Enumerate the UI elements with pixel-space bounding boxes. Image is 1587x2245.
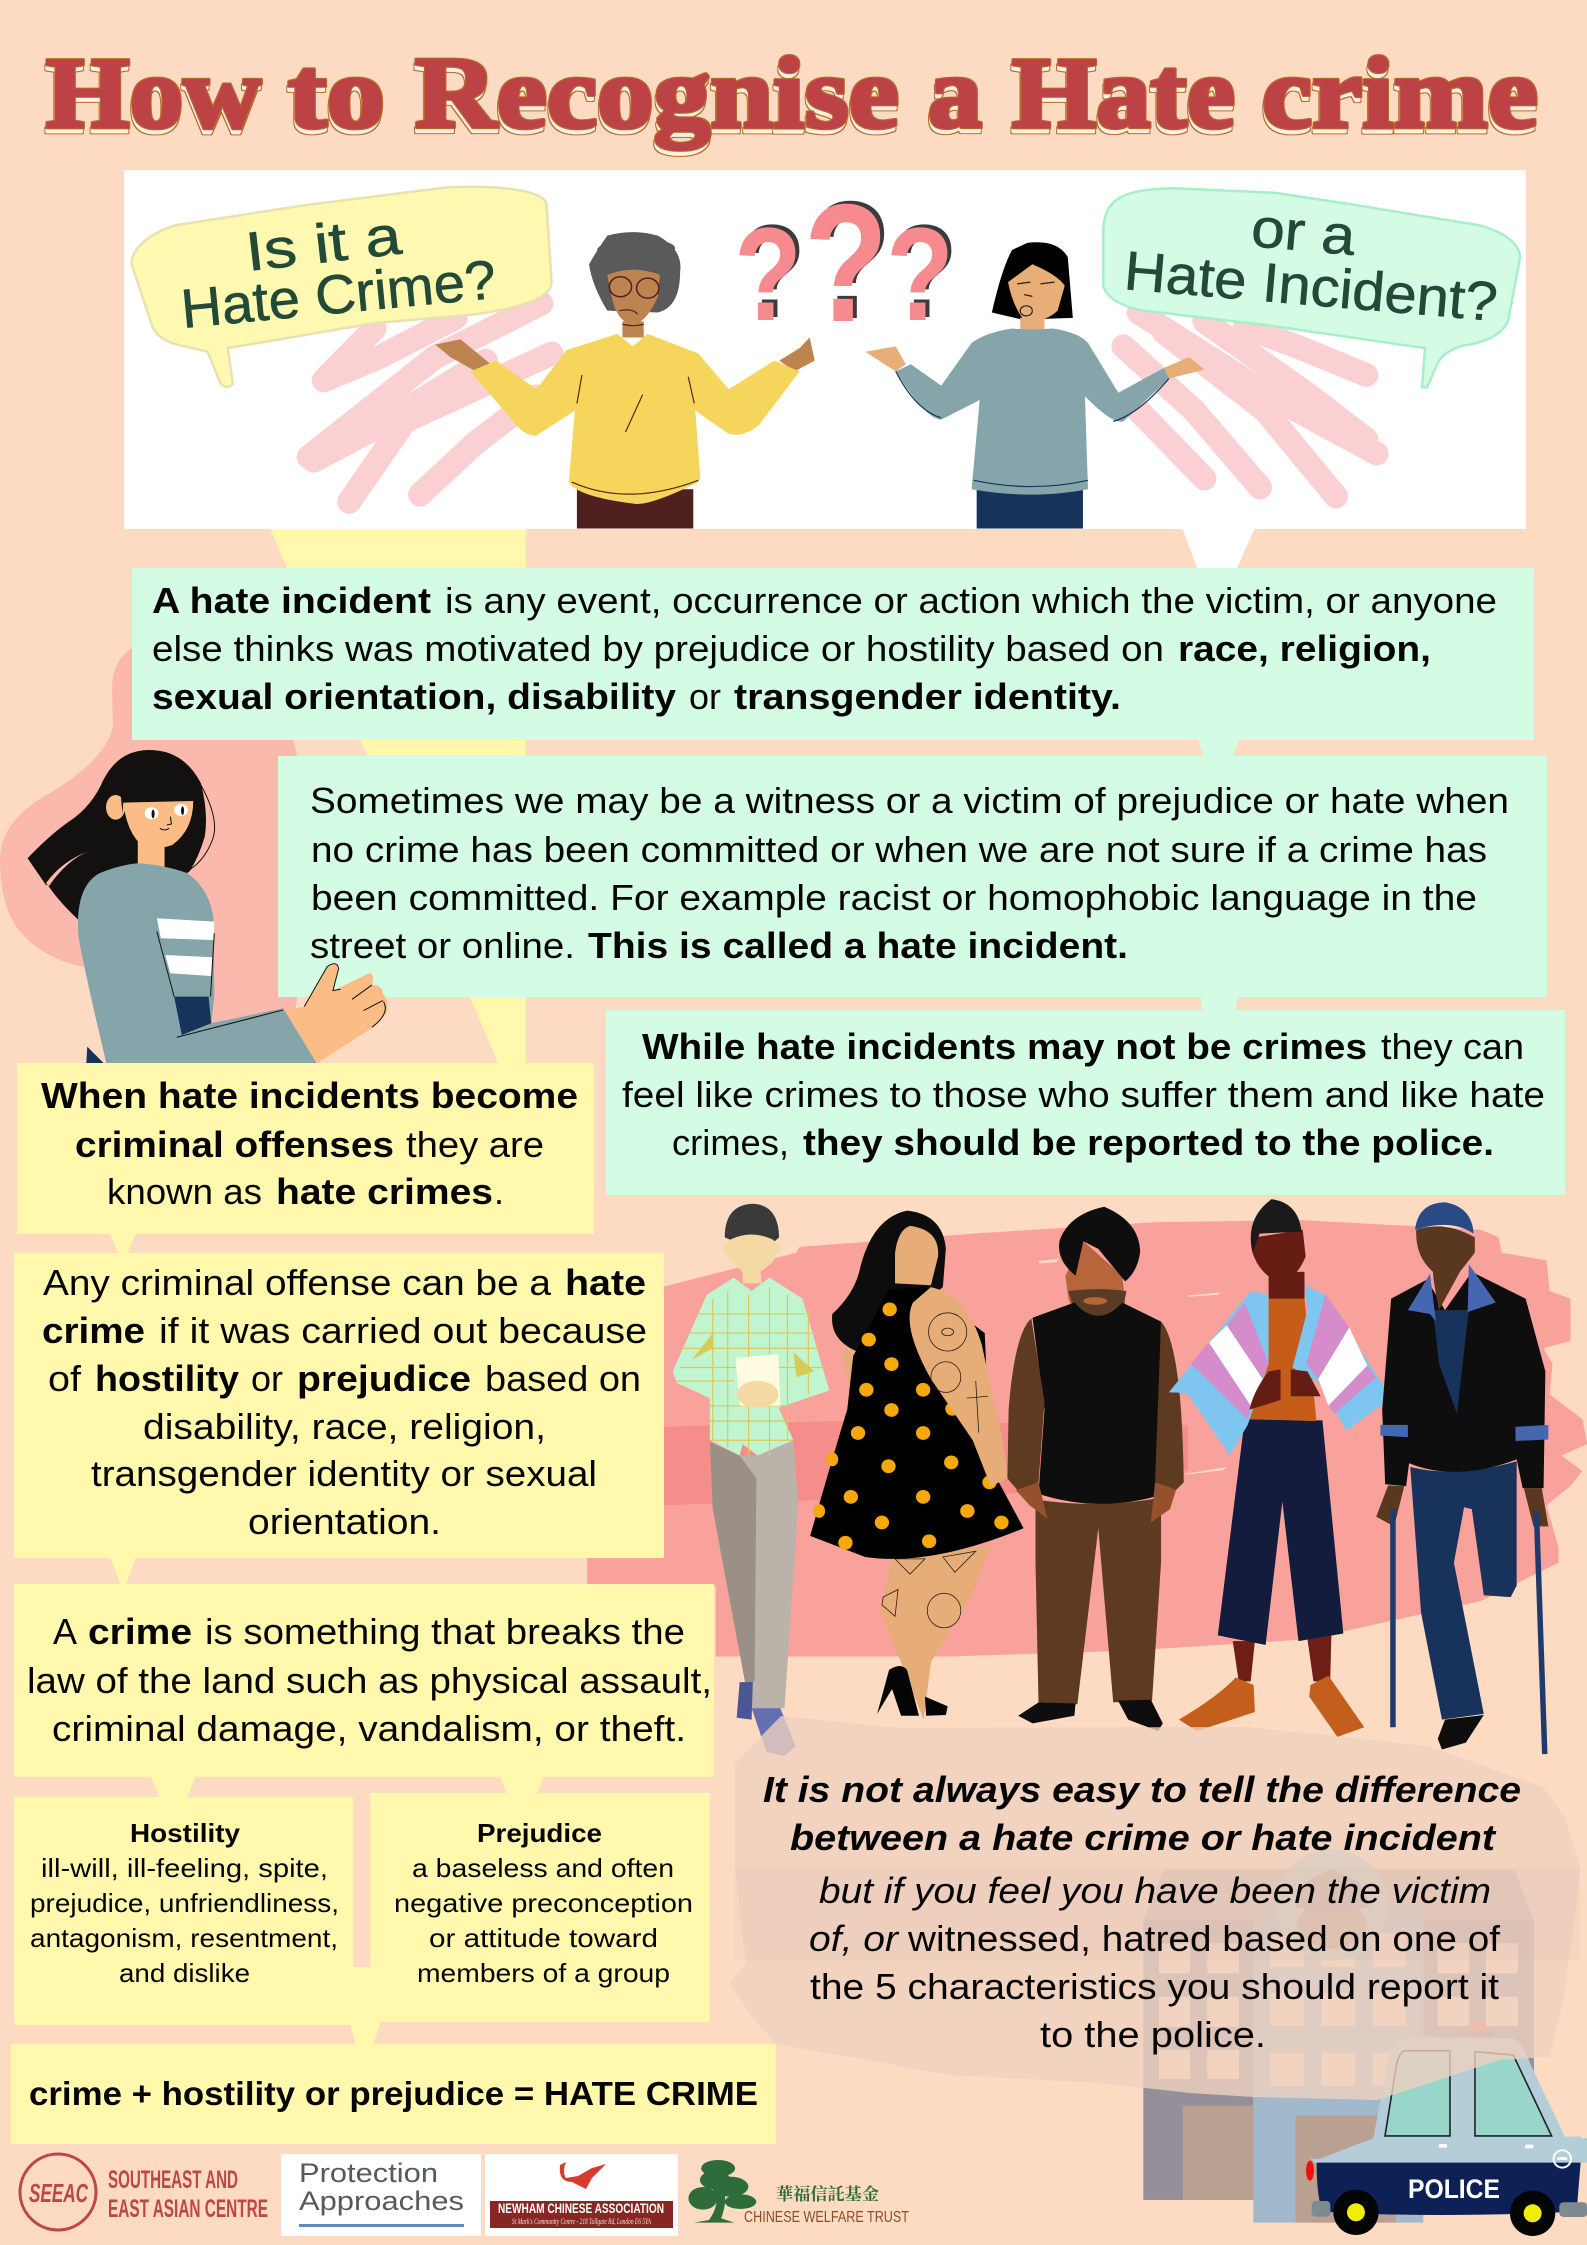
- panel: any criminal offense can be a hate crime: based on: [485, 1358, 641, 1399]
- speech bubble: is it a hate crime: [132, 187, 552, 387]
- panel: any criminal offense can be a hate crime: hostility: [95, 1358, 239, 1399]
- title: crime: [1262, 37, 1538, 150]
- panel: when hate incidents become criminal offenses: [17, 1063, 594, 1254]
- panel: when hate incidents become criminal offenses: .: [494, 1171, 504, 1212]
- panel: a crime is something: criminal damage, vandalism, or theft.: [52, 1708, 686, 1749]
- panel: while hate incidents may not be crimes: they can: [1381, 1026, 1524, 1067]
- panel: hate incident definition: else thinks was motivated by prejudice or hostility based on: [152, 628, 1164, 669]
- closing text: it is not always easy: but if you feel you have been the victim: [819, 1870, 1491, 1911]
- closing text: it is not always easy: witnessed, hatred based on one of: [907, 1918, 1501, 1959]
- text: prejudice definition: or attitude toward: [429, 1923, 658, 1953]
- panel: while hate incidents may not be crimes: While hate incidents may not be crimes: [642, 1026, 1367, 1067]
- title: Recognise: [415, 37, 899, 150]
- panel: a crime is something: crime: [88, 1611, 192, 1652]
- white illustration panel: [124, 170, 1526, 570]
- panel: a crime is something: is something that breaks the: [205, 1611, 685, 1652]
- closing text: it is not always easy: of, or: [809, 1918, 900, 1959]
- logo: Newham Chinese Association: [485, 2154, 678, 2236]
- title: Hate: [1012, 37, 1235, 150]
- panel: sometimes we may be a witness: street or online.: [310, 925, 575, 966]
- logo: Newham Chinese Association: NEWHAM CHINESE ASSOCIATION: [498, 2200, 664, 2216]
- panel: any criminal offense can be a hate crime: disability, race, religion,: [143, 1406, 546, 1447]
- logo: Protection Approaches: [281, 2154, 481, 2236]
- panel: hate incident definition: [132, 568, 1534, 757]
- panel: hate crime formula: crime + hostility or prejudice = HATE CRIME: [29, 2075, 758, 2112]
- logo: SEEAC: SOUTHEAST AND: [108, 2166, 238, 2194]
- panel: any criminal offense can be a hate crime: if it was carried out because: [159, 1310, 647, 1351]
- panel: when hate incidents become criminal offenses: known as: [107, 1171, 262, 1212]
- panel: while hate incidents may not be crimes: feel like crimes to those who suffer them and like hate: [622, 1074, 1545, 1115]
- title: a: [928, 37, 982, 150]
- logo: Chinese Welfare Trust: 華福信託基金: [776, 2184, 879, 2204]
- panel: hostility and prejudice definitions: [14, 1793, 710, 2045]
- panel: hate incident definition: is any event, occurrence or action which the victim, or anyone: [445, 580, 1497, 621]
- illustration: question marks: ?: [734, 200, 802, 348]
- panel: sometimes we may be a witness: [278, 756, 1547, 1012]
- panel: when hate incidents become criminal offenses: When hate incidents become: [41, 1075, 578, 1116]
- panel: a crime is something: A: [53, 1611, 77, 1652]
- beige brush stroke behind the closing text: [730, 1716, 1580, 2100]
- illustration: group of five people: [673, 1199, 1548, 1756]
- man with crutches: [1376, 1202, 1548, 1754]
- logo: Chinese Welfare Trust: [688, 2160, 909, 2226]
- illustration: question marks: ?: [886, 200, 954, 348]
- panel: hate incident definition: sexual orientation, disability: [152, 676, 676, 717]
- heading: hostility: Hostility: [130, 1818, 241, 1848]
- panel: hate incident definition: or: [689, 676, 721, 717]
- speech bubble: or a hate incident: Hate Incident?: [1122, 239, 1500, 333]
- text: prejudice definition: a baseless and often: [412, 1853, 674, 1883]
- person with notepad: [673, 1204, 829, 1756]
- illustration: pink scribbles: [309, 304, 1376, 502]
- closing text: it is not always easy: between a hate crime or hate incident: [790, 1817, 1497, 1858]
- panel: hate crime formula: [11, 2044, 776, 2144]
- speech bubble: or a hate incident: or a: [1249, 196, 1358, 267]
- panel: any criminal offense can be a hate crime: transgender identity or sexual: [91, 1453, 597, 1494]
- text: hostility definition: antagonism, resentment,: [30, 1923, 338, 1953]
- panel: a crime is something: law of the land such as physical assault,: [27, 1660, 712, 1701]
- panel: any criminal offense can be a hate crime: prejudice: [297, 1358, 471, 1399]
- illustration: question marks: [734, 169, 954, 357]
- police station building: [1143, 1849, 1534, 2223]
- panel: while hate incidents may not be crimes: crimes,: [672, 1122, 789, 1163]
- panel: when hate incidents become criminal offenses: hate crimes: [276, 1171, 493, 1212]
- panel: while hate incidents may not be crimes: [606, 1010, 1565, 1195]
- logo: SEEAC: EAST ASIAN CENTRE: [108, 2195, 268, 2223]
- closing text: it is not always easy: It is not always easy to tell the difference: [763, 1769, 1521, 1810]
- title: [46, 37, 1538, 150]
- heading: prejudice: Prejudice: [477, 1818, 602, 1848]
- panel: sometimes we may be a witness: Sometimes we may be a witness or a victim of prejudice or hate when: [310, 780, 1509, 821]
- person with trans flag: [1169, 1199, 1391, 1737]
- title: How: [46, 37, 261, 150]
- illustration: question marks: ?: [804, 169, 888, 357]
- illustration: person in yellow sweater: [435, 232, 815, 529]
- closing text: it is not always easy: [763, 1769, 1521, 2055]
- text: hostility definition: prejudice, unfriendliness,: [30, 1888, 339, 1918]
- salmon blob behind the woman: [0, 648, 297, 1040]
- illustration: person in blue sweater: [865, 242, 1204, 529]
- text: prejudice definition: [394, 1853, 693, 1988]
- pink brush stroke behind the group of people: [587, 1220, 1587, 1656]
- panel: while hate incidents may not be crimes: they should be reported to the police.: [803, 1122, 1494, 1163]
- panel: any criminal offense can be a hate crime: [14, 1253, 664, 1585]
- text: prejudice definition: members of a group: [417, 1958, 670, 1988]
- text: prejudice definition: negative preconception: [394, 1888, 693, 1918]
- text: hostility definition: ill-will, ill-feeling, spite,: [41, 1853, 328, 1883]
- panel: sometimes we may be a witness: no crime has been committed or when we are not sure if a crime has: [311, 829, 1487, 870]
- logo: SEEAC: SEEAC: [29, 2178, 89, 2208]
- police car: [1306, 2019, 1587, 2236]
- speech bubble: is it a hate crime: Is it a: [242, 204, 405, 283]
- speech bubble: is it a hate crime: Hate Crime?: [178, 248, 499, 340]
- panel: when hate incidents become criminal offenses: criminal offenses: [75, 1124, 394, 1165]
- panel: hate incident definition: transgender identity.: [734, 676, 1121, 717]
- panel: hate incident definition: race, religion,: [1178, 628, 1431, 669]
- panel: when hate incidents become criminal offenses: they are: [406, 1124, 544, 1165]
- panel: any criminal offense can be a hate crime: Any criminal offense can be a: [43, 1262, 552, 1303]
- panel: any criminal offense can be a hate crime: orientation.: [248, 1501, 441, 1542]
- closing text: it is not always easy: the 5 characteristics you should report it: [810, 1966, 1499, 2007]
- man in turban: [1007, 1207, 1184, 1731]
- panel: any criminal offense can be a hate crime: of: [48, 1358, 82, 1399]
- yellow speech tail behind the text boxes: [270, 528, 526, 1065]
- woman in polka dot dress: [810, 1211, 1024, 1720]
- panel: any criminal offense can be a hate crime: hate: [565, 1262, 646, 1303]
- logo: Protection Approaches: Approaches: [299, 2186, 464, 2216]
- police car label: POLICE: [1408, 2174, 1500, 2204]
- panel: sometimes we may be a witness: This is called a hate incident.: [588, 925, 1128, 966]
- illustration: woman pointing at the text: [28, 750, 387, 1067]
- panel: hate incident definition: A hate incident: [152, 580, 431, 621]
- speech bubble: or a hate incident: [1103, 188, 1520, 387]
- panel: sometimes we may be a witness: been committed. For example racist or homophobic language in the: [311, 877, 1477, 918]
- text: hostility definition: [30, 1853, 339, 1988]
- logo: Newham Chinese Association: St Mark's Community Centre - 218 Tollgate Rd, London E6 5YA: [512, 2217, 651, 2226]
- panel: any criminal offense can be a hate crime: crime: [42, 1310, 145, 1351]
- panel: a crime is something: [14, 1584, 714, 1798]
- logo: Chinese Welfare Trust: CHINESE WELFARE TRUST: [744, 2209, 909, 2226]
- text: hostility definition: and dislike: [119, 1958, 250, 1988]
- closing text: it is not always easy: to the police.: [1040, 2014, 1266, 2055]
- logo: SEEAC: [20, 2154, 268, 2230]
- logo: Protection Approaches: Protection: [299, 2158, 438, 2188]
- title: to: [288, 37, 385, 150]
- panel: any criminal offense can be a hate crime: or: [251, 1358, 283, 1399]
